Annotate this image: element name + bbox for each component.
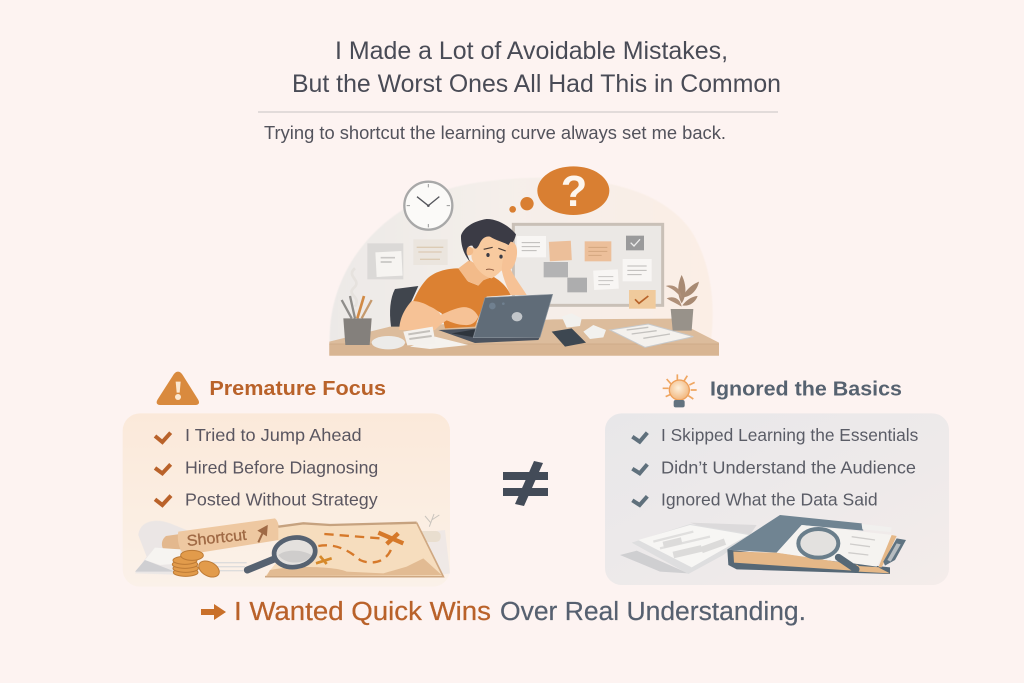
illustration: binder and papers [620, 515, 906, 574]
near arm and hand [399, 301, 478, 330]
steam lines [352, 268, 357, 307]
illustration: person at desk [329, 166, 719, 356]
shortcut label [178, 518, 279, 555]
torso [413, 268, 511, 328]
left section: Premature Focus [123, 372, 450, 587]
hand on head [502, 242, 517, 271]
heading: Premature Focus [209, 378, 386, 400]
not equal sign [503, 461, 548, 506]
stack of papers [610, 324, 693, 347]
twig [425, 514, 439, 527]
roller ends [162, 534, 182, 549]
conclusion: I Wanted Quick Wins [234, 598, 491, 626]
person [390, 219, 527, 330]
crumpled papers and notes [372, 313, 606, 349]
title [292, 37, 781, 98]
subtitle: Trying to shortcut the learning curve always set me back. [264, 123, 726, 143]
plant [666, 275, 699, 331]
conclusion [201, 598, 806, 626]
face [471, 236, 509, 278]
ear [465, 247, 473, 255]
phone [552, 328, 586, 347]
checklist: I Skipped Learning the Essentials [661, 425, 918, 445]
bulletin board [513, 224, 663, 309]
checklist: Didn’t Understand the Audience [661, 458, 916, 478]
icon: light bulb [663, 374, 697, 407]
right section: Ignored the Basics [605, 374, 949, 585]
icon: question thought bubble [509, 166, 609, 216]
icon: wall clock [404, 182, 452, 230]
chair [390, 286, 418, 327]
icon: question thought bubble: ? [561, 168, 587, 216]
checklist: Ignored What the Data Said [661, 490, 878, 510]
supporting arm [502, 268, 527, 295]
checklist: Hired Before Diagnosing [185, 458, 378, 478]
shadow [620, 551, 688, 573]
desk [329, 319, 719, 356]
illustration: shortcut scroll and map [135, 514, 450, 580]
checklist: Posted Without Strategy [185, 490, 378, 510]
binder [727, 515, 906, 574]
checklist: I Tried to Jump Ahead [185, 425, 362, 445]
ground shadow [135, 521, 187, 575]
conclusion: Over Real Understanding. [500, 598, 806, 626]
title: I Made a Lot of Avoidable Mistakes, [335, 37, 728, 65]
icon: warning triangle [157, 372, 199, 405]
hair [461, 219, 516, 262]
title: But the Worst Ones All Had This in Common [292, 70, 781, 98]
magnifying glass [798, 529, 856, 569]
treasure map [265, 523, 443, 577]
left wall notes [367, 239, 448, 279]
heading: Ignored the Basics [710, 379, 902, 401]
magnifying glass [247, 535, 317, 570]
panel: premature focus [123, 413, 450, 587]
panel: ignored the basics [605, 413, 949, 585]
pen cup [342, 296, 372, 345]
facial features [484, 247, 507, 251]
backdrop dome [330, 178, 713, 347]
checklist [632, 425, 918, 510]
open papers [632, 524, 750, 574]
laptop [438, 294, 553, 343]
shortcut label: Shortcut [186, 527, 248, 550]
icon: arrow [201, 604, 226, 620]
checklist [155, 425, 378, 510]
neck [458, 260, 494, 286]
coin stack [172, 550, 222, 580]
cloth [135, 560, 175, 572]
